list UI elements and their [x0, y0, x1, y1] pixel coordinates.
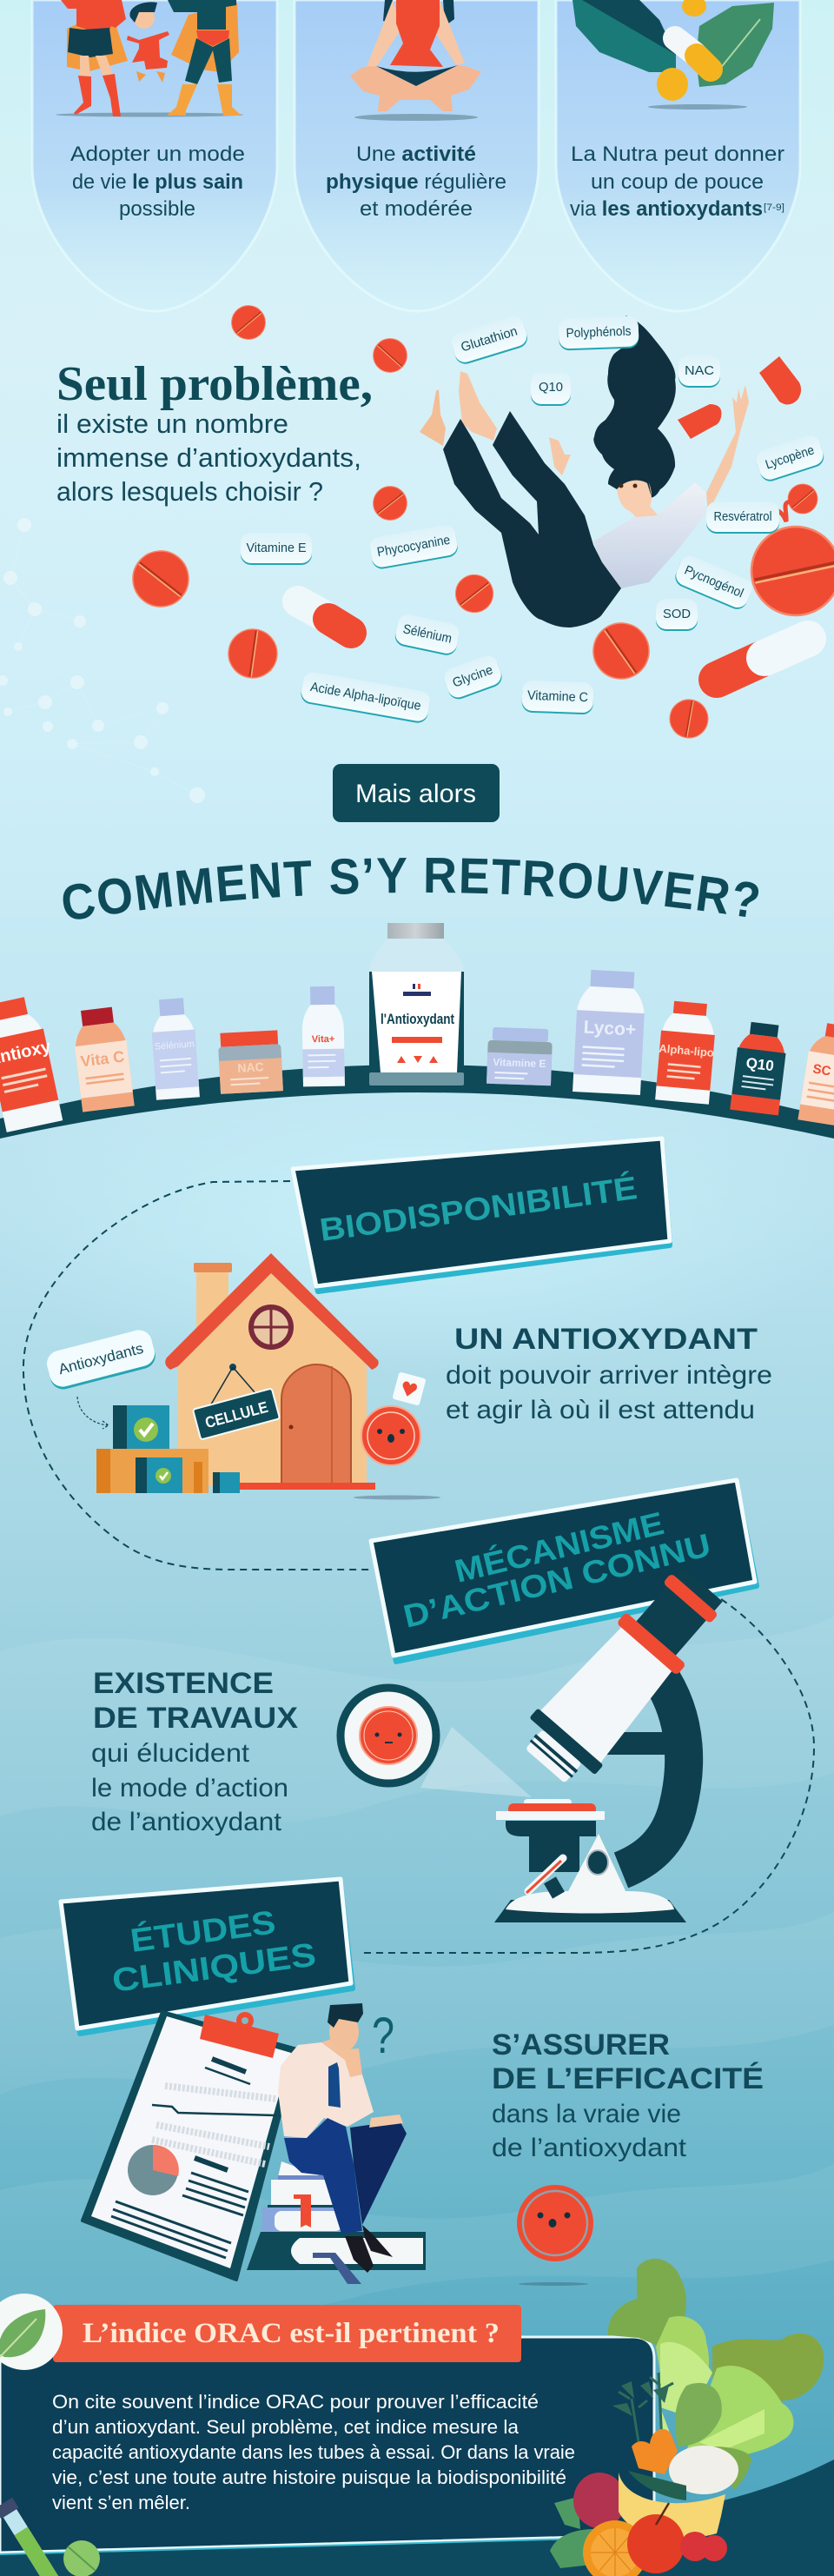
orange [583, 2520, 647, 2576]
heading box: mécanisme [371, 1480, 757, 1662]
dashed connector: biodisponibilité to mécanisme [23, 1181, 369, 1570]
heading: seul problème [56, 357, 373, 507]
heading: seul problème: alors lesquels choisir ? [56, 476, 323, 507]
bottle: q10: Q10 [745, 1055, 775, 1074]
door [281, 1364, 351, 1484]
orac body text: d’un antioxydant. Seul problème, cet indice mesure la [52, 2416, 520, 2438]
label: pycnogénol [672, 553, 755, 613]
text: adopter: Adopter un mode [70, 143, 245, 166]
dashed connector: mécanisme to études [359, 1599, 814, 1953]
orac body text: capacité antioxydante dans les tubes à essai. Or dans la vraie [52, 2441, 575, 2463]
label: vitamine c: Vitamine C [527, 688, 588, 705]
bottle: q10 [730, 1020, 789, 1115]
label: resvératrol: Resvératrol [714, 509, 771, 524]
bottle: vitamine e jar [486, 1027, 553, 1086]
button: mais alors: Mais alors [355, 780, 476, 808]
stage [529, 1834, 579, 1872]
sign: cellule [193, 1364, 280, 1440]
illustration: falling woman [420, 315, 749, 627]
banana [619, 2473, 725, 2539]
text: adopter: possible [119, 197, 195, 221]
sign: cellule: CELLULE [203, 1398, 270, 1431]
text: s'assurer de l'efficacité: de l’antioxydant [492, 2134, 687, 2162]
bottle: sc: SC [811, 1061, 832, 1079]
orac body text: On cite souvent l’indice ORAC pour prouver l’efficacité [52, 2391, 539, 2413]
base [239, 1483, 375, 1490]
shirt [593, 482, 706, 588]
label: polyphénols [558, 315, 639, 351]
text: nutra: via les antioxydants [570, 197, 763, 221]
label: nac [678, 355, 720, 388]
delivery boxes [96, 1405, 240, 1493]
label: antioxydants [44, 1327, 158, 1392]
cauliflower [669, 2446, 738, 2494]
heading: seul problème: immense d’antioxydants, [56, 442, 361, 473]
light beam [420, 1727, 532, 1797]
header: l'indice orac [53, 2305, 521, 2362]
strawberries [680, 2532, 727, 2561]
icon: leaf badge [0, 2294, 63, 2370]
label: sod: SOD [663, 607, 691, 621]
label: antioxydants: Antioxydants [56, 1340, 145, 1378]
header: l'indice orac: L’indice ORAC est-il pertinent ? [83, 2318, 500, 2349]
label: glycine: Glycine [451, 662, 495, 691]
label: resvératrol [706, 501, 779, 534]
bottle: lyco+ [573, 969, 646, 1095]
house body [178, 1273, 367, 1486]
text: activité: et modérée [360, 197, 473, 221]
label: sélénium [394, 613, 461, 657]
pill labels [241, 314, 826, 725]
man [278, 2003, 407, 2273]
heading: comment s'y retrouver: COMMENT S’Y RETROUVER? [63, 858, 759, 920]
icon: woman meditating [350, 0, 481, 121]
bottle: vitamine e jar: Vitamine E [493, 1056, 546, 1070]
shelf [0, 1065, 834, 1139]
text: adopter [70, 143, 245, 221]
panel: activité physique [295, 0, 539, 311]
icon: leaves and capsule [573, 0, 774, 110]
label: acide alpha-lipoïque [300, 670, 432, 725]
legs [443, 411, 621, 627]
label: sod [656, 599, 698, 631]
orac body text [52, 2391, 575, 2513]
chart lines [111, 2059, 276, 2258]
text: un antioxydant [446, 1323, 772, 1424]
bottle: nac jar: NAC [237, 1059, 264, 1075]
icon: superhero family [56, 0, 243, 116]
bottle: nac jar [217, 1030, 283, 1094]
label: glutathion [449, 314, 530, 367]
bottle: sélénium: Sélénium [154, 1039, 195, 1052]
orac body text: vie, c’est une toute autre histoire puisque la biodisponibilité [52, 2466, 566, 2488]
tube [513, 1556, 736, 1795]
arm [621, 1673, 684, 1870]
molecule network [0, 518, 205, 803]
arrow: to boxes [77, 1397, 109, 1429]
face [617, 475, 658, 517]
text: un antioxydant: et agir là où il est attendu [446, 1396, 755, 1424]
illustration: house cell with boxes [44, 1253, 440, 1500]
text: activité: physique régulière [326, 170, 506, 194]
panel: la nutra [556, 0, 800, 311]
heading: seul problème: Seul problème, [56, 357, 373, 411]
bottles [0, 923, 834, 1133]
label: q10 [531, 372, 571, 406]
chimney [194, 1263, 232, 1332]
illustration: vegetables and fruits [550, 2259, 824, 2576]
feet [459, 371, 497, 441]
label: vitamine e: Vitamine E [247, 541, 306, 555]
label: phycocyanine [368, 524, 460, 570]
bottle: antioxy [0, 993, 67, 1133]
text: s'assurer de l'efficacité [492, 2028, 764, 2162]
text: nutra: [7-9] [764, 202, 784, 213]
salad leaves [608, 2259, 824, 2490]
hair [593, 315, 676, 498]
bottle: sélénium [149, 998, 200, 1100]
orac body text: vient s’en mêler. [52, 2492, 190, 2513]
label: vitamine e [241, 533, 312, 565]
text: existence de travaux [91, 1667, 298, 1836]
heading box: études cliniques: CLINIQUES [110, 1936, 318, 2000]
text: activité: Une activité [356, 143, 476, 166]
label: lycopène: Lycopène [764, 442, 816, 473]
carrot [632, 2429, 678, 2474]
background waves [0, 1617, 834, 2320]
heading box: mécanisme: D’ACTION CONNU [400, 1527, 714, 1635]
arm [706, 385, 749, 513]
magnified tablet [341, 1688, 436, 1783]
heading box: études cliniques: ÉTUDES [128, 1902, 278, 1960]
pie chart [128, 2145, 179, 2195]
bottle: alpha-lipo: Alpha-lipo [659, 1041, 715, 1059]
glow under the shelf [0, 1060, 834, 1373]
label: phycocyanine: Phycocyanine [376, 533, 451, 560]
heading box: mécanisme: MÉCANISME [451, 1505, 667, 1590]
text: un antioxydant: doit pouvoir arriver intègre [446, 1361, 772, 1390]
icon: floating tablet [517, 2185, 593, 2286]
heading box: études cliniques [61, 1879, 353, 2034]
icon: question mark: ? [372, 2008, 394, 2064]
illustration: books and thinking man [247, 2003, 426, 2284]
bottle: vita+ [301, 986, 345, 1086]
button: mais alors [333, 764, 500, 822]
illustration: microscope [341, 1556, 736, 1922]
label: vitamine c [521, 681, 594, 714]
label: lycopène [754, 433, 826, 484]
bottle: lyco+: Lyco+ [583, 1018, 637, 1040]
red tablets and capsules [122, 299, 834, 740]
bottle: vita+: Vita+ [312, 1034, 334, 1045]
panel: adopter un mode de vie [32, 0, 277, 311]
books [247, 2161, 426, 2284]
label: sélénium: Sélénium [401, 621, 453, 647]
heading: seul problème: il existe un nombre [56, 408, 288, 439]
text: un antioxydant: UN ANTIOXYDANT [454, 1323, 758, 1356]
text: existence de travaux: le mode d’action [91, 1774, 288, 1803]
dark leaf [628, 2471, 686, 2500]
label: glutathion: Glutathion [460, 324, 520, 355]
text: existence de travaux: qui élucident [91, 1739, 250, 1768]
bottle: vita c: Vita C [80, 1047, 125, 1070]
icon: happy tablet [354, 1371, 440, 1500]
icon: test tube and pill [0, 2498, 100, 2576]
text: adopter: de vie le plus sain [72, 170, 243, 194]
bottle: sc [798, 1021, 834, 1128]
heading box: biodisponibilité [293, 1139, 670, 1291]
clip [200, 2012, 279, 2058]
text: existence de travaux: de l’antioxydant [91, 1808, 282, 1836]
text: nutra: La Nutra peut donner [571, 143, 784, 166]
text: existence de travaux: EXISTENCE [93, 1667, 274, 1700]
heading box: biodisponibilité: BIODISPONIBILITÉ [318, 1170, 639, 1248]
label: acide alpha-lipoïque: Acide Alpha-lipoïque [309, 680, 422, 714]
bottle: vita c [70, 1006, 135, 1112]
label: pycnogénol: Pycnogénol [682, 563, 745, 601]
label: polyphénols: Polyphénols [566, 324, 632, 341]
text: existence de travaux: DE TRAVAUX [93, 1702, 298, 1735]
apple [627, 2503, 685, 2573]
text: nutra: un coup de pouce [591, 170, 764, 194]
panel: orac [0, 2337, 654, 2554]
text: s'assurer de l'efficacité: dans la vraie vie [492, 2100, 681, 2128]
green leaves [550, 2497, 599, 2568]
bottle: alpha-lipo [654, 1000, 718, 1105]
pomegranate [573, 2473, 626, 2528]
text: s'assurer de l'efficacité: DE L’EFFICACITÉ [492, 2062, 764, 2095]
window [251, 1307, 291, 1347]
bottle: l'antioxydant [369, 923, 464, 1086]
roof [165, 1253, 379, 1370]
bottle: l'antioxydant: l'Antioxydant [381, 1011, 454, 1027]
label: q10: Q10 [539, 380, 563, 395]
left hand [549, 437, 571, 475]
base [494, 1900, 686, 1922]
label: nac: NAC [685, 363, 714, 378]
text: activité [326, 143, 506, 221]
text: nutra [570, 143, 784, 221]
label: glycine [441, 653, 505, 702]
text: s'assurer de l'efficacité: S’ASSURER [492, 2028, 670, 2061]
bottom dark wave [0, 2460, 834, 2576]
illustration: clipboard [83, 2012, 297, 2280]
